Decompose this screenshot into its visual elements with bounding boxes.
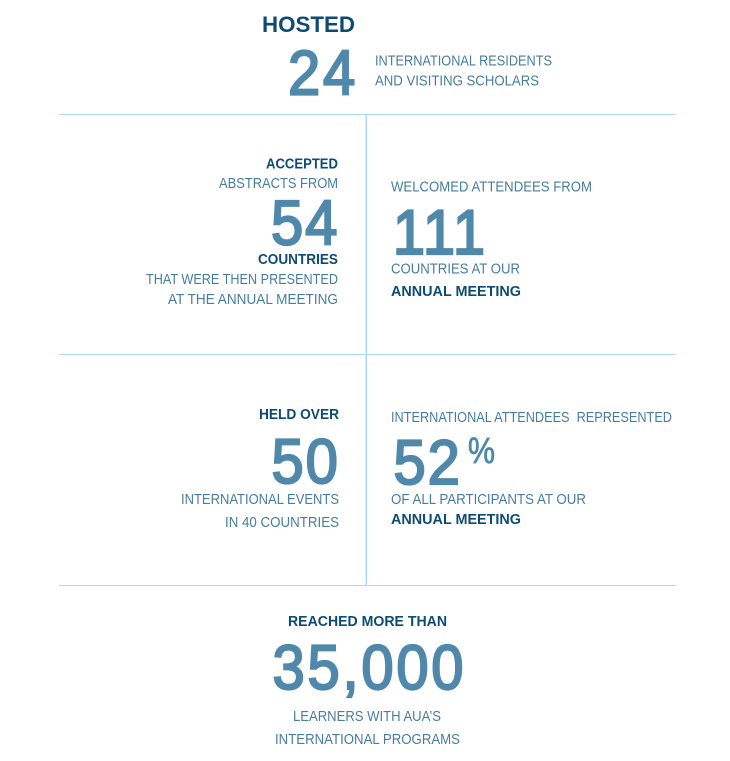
text: international attendees represented: INTERNATIONAL ATTENDEES REPRESENTED	[391, 409, 672, 426]
number: 52 percent: 52	[394, 427, 462, 498]
number: 50: 50	[272, 426, 340, 497]
number: 35,000: 35,000	[272, 632, 466, 703]
text: abstracts from: ABSTRACTS FROM	[219, 175, 338, 192]
number: 24: 24	[288, 37, 358, 108]
panel: held over 50 events	[181, 407, 340, 531]
text: learners description: LEARNERS WITH AUA’S	[293, 708, 441, 725]
text: events description	[181, 491, 339, 531]
heading: annual meeting: ANNUAL MEETING	[391, 284, 521, 300]
number: 52 percent: %	[468, 430, 495, 471]
text: events description: IN 40 COUNTRIES	[225, 514, 339, 531]
heading: accepted: ACCEPTED	[266, 156, 338, 172]
heading: annual meeting: ANNUAL MEETING	[391, 512, 521, 528]
number: 52 percent	[394, 427, 495, 498]
heading: countries: COUNTRIES	[258, 252, 338, 268]
text: events description: INTERNATIONAL EVENTS	[181, 491, 339, 508]
text: abstracts description: THAT WERE THEN PRESENTED	[146, 271, 338, 288]
text: residents description: INTERNATIONAL RESIDENTS	[375, 52, 552, 70]
panel: reached 35,000 learners	[272, 614, 466, 748]
text: welcomed attendees from: WELCOMED ATTENDEES FROM	[391, 178, 592, 196]
number: 54: 54	[271, 187, 339, 258]
panel: 52 percent attendees	[391, 409, 672, 528]
panel: accepted abstracts 54	[146, 156, 339, 308]
heading: reached more than: REACHED MORE THAN	[288, 614, 447, 630]
text: residents description	[375, 52, 552, 90]
number: 111: 111	[393, 197, 485, 268]
text: abstracts description: AT THE ANNUAL MEETING	[168, 291, 338, 308]
panel: welcomed attendees 111	[391, 178, 592, 300]
text: learners description	[275, 708, 460, 748]
text: residents description: AND VISITING SCHOLARS	[375, 72, 539, 90]
text: of all participants: OF ALL PARTICIPANTS AT OUR	[391, 491, 586, 508]
heading: hosted: HOSTED	[262, 12, 355, 37]
panel: hosted 24 residents	[262, 12, 552, 108]
text: countries at our: COUNTRIES AT OUR	[391, 260, 520, 278]
text: learners description: INTERNATIONAL PROGRAMS	[275, 731, 460, 748]
heading: held over: HELD OVER	[259, 407, 339, 423]
text: abstracts description	[146, 271, 338, 308]
